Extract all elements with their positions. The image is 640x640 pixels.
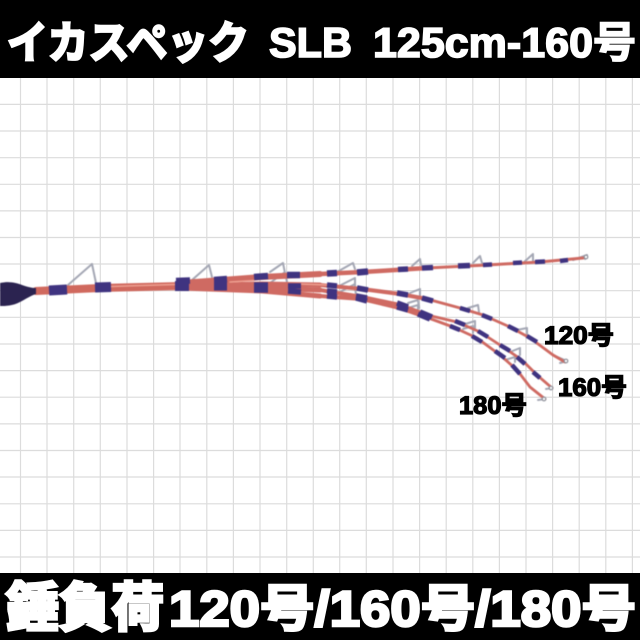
rod guides	[68, 254, 587, 400]
top title bar	[0, 0, 640, 78]
label: 160号: 160号	[558, 374, 627, 402]
rod blank: 160 curve	[182, 287, 552, 388]
fishing rod comparison illustration	[0, 254, 588, 401]
rod blank: straight unloaded branch	[182, 258, 583, 283]
grip	[0, 282, 36, 306]
thread wraps	[49, 260, 568, 378]
bottom sinker rating bar	[0, 573, 640, 640]
rod blank: 120 curve	[182, 284, 565, 362]
label: 180号: 180号	[459, 392, 527, 420]
rod blank: 180 curve	[182, 288, 545, 399]
bottom sinker rating bar: 120号/160号/180号	[169, 581, 636, 637]
top title bar: イカスペック	[7, 19, 249, 68]
tip tops	[542, 255, 588, 401]
top title bar: SLB	[269, 19, 352, 66]
label: 120号: 120号	[544, 322, 614, 350]
rod blank: butt section	[36, 286, 182, 291]
top title bar: 125cm-160号	[373, 19, 636, 66]
bottom sinker rating bar: 錘負荷	[6, 579, 164, 638]
rod highlight	[111, 280, 327, 286]
